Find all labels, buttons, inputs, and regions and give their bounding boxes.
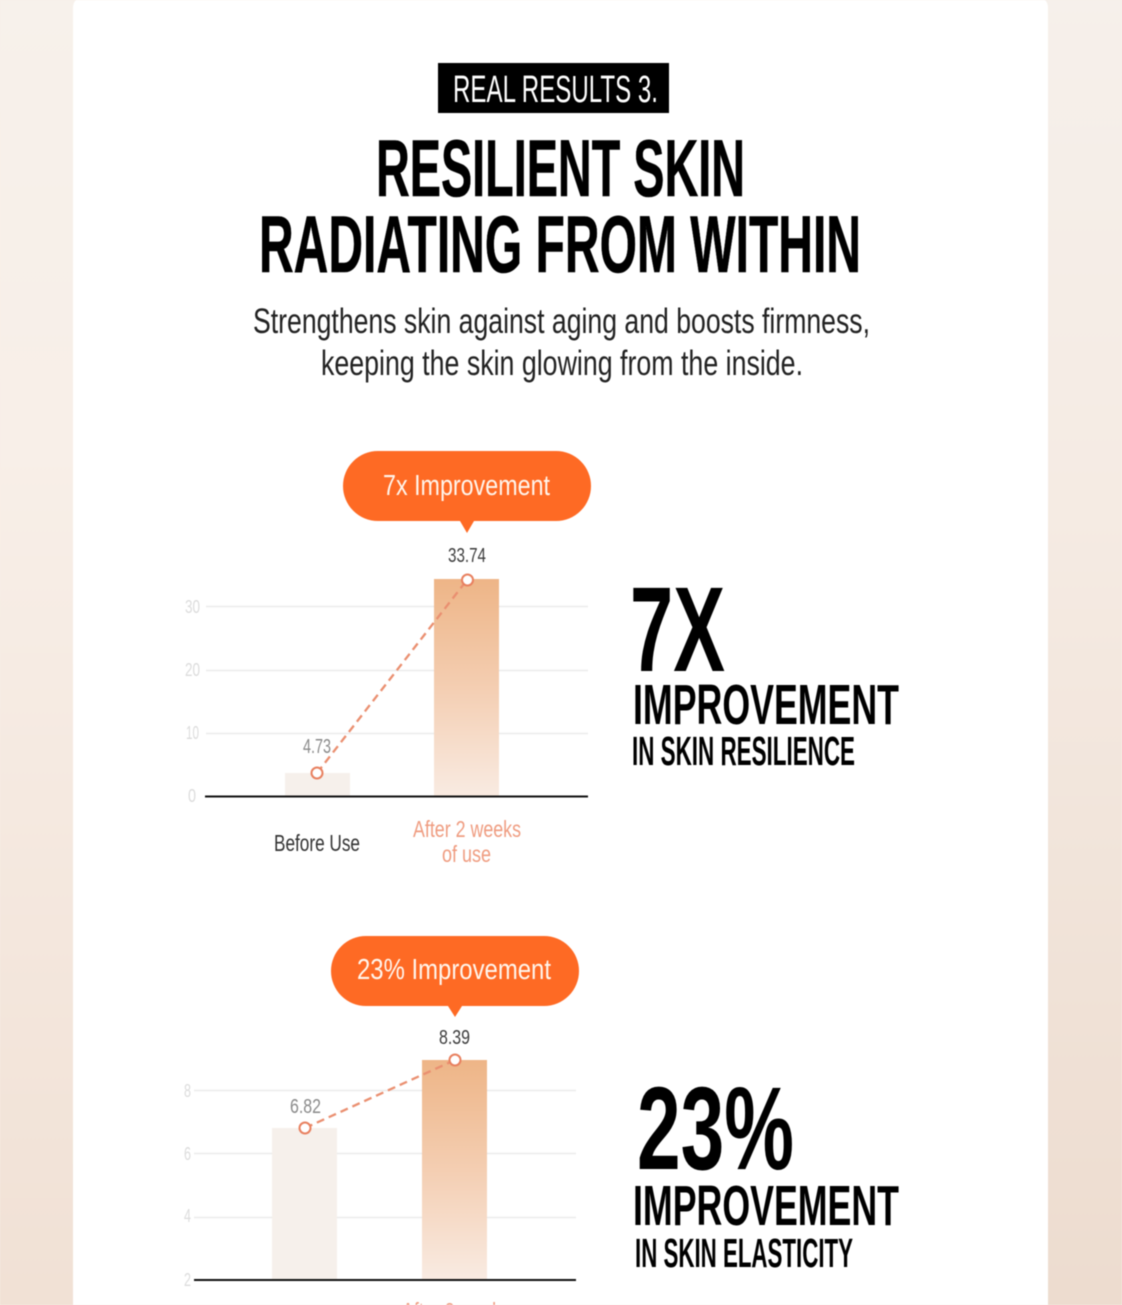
subtitle: Strengthens skin against aging and boosts firmness,	[253, 302, 870, 341]
dashed trend line	[300, 1054, 460, 1134]
grid lines and y axis labels: 6	[184, 1144, 191, 1164]
stat: 23% improvement in skin elasticity: IMPROVEMENT	[633, 1174, 899, 1238]
category labels: Before Use	[274, 830, 360, 856]
tag: real results 3: REAL RESULTS 3.	[453, 69, 658, 111]
grid lines and y axis labels: 10	[186, 723, 199, 743]
stat: 7x improvement in skin resilience	[630, 561, 899, 774]
subtitle: keeping the skin glowing from the inside.	[321, 344, 803, 383]
grid lines and y axis labels: 20	[185, 660, 200, 680]
stat: 7x improvement in skin resilience: IN SKIN RESILIENCE	[632, 728, 855, 774]
chart: skin elasticity	[184, 936, 579, 1305]
subtitle	[253, 302, 870, 383]
category labels: of use	[442, 841, 491, 867]
stat: 7x improvement in skin resilience: 7X	[630, 561, 725, 697]
grid lines and y axis labels: 8	[184, 1081, 191, 1101]
grid lines and y axis labels: 2	[184, 1270, 191, 1290]
bar: before use	[272, 1128, 337, 1279]
value labels: 6.82	[290, 1096, 321, 1118]
stat: 7x improvement in skin resilience: IMPROVEMENT	[633, 673, 899, 737]
value labels	[290, 1027, 470, 1118]
axis line	[205, 796, 588, 798]
stat: 23% improvement in skin elasticity	[633, 1063, 899, 1276]
value labels: 4.73	[303, 736, 331, 758]
grid lines and y axis labels: 0	[188, 786, 196, 806]
title	[259, 124, 861, 290]
grid lines and y axis labels	[185, 597, 588, 806]
callout: 23% improvement: 23% Improvement	[357, 954, 551, 986]
tag: real results 3	[438, 63, 669, 113]
title: RESILIENT SKIN	[376, 124, 745, 214]
value labels	[303, 545, 486, 758]
value labels: 33.74	[448, 545, 486, 567]
grid lines and y axis labels: 30	[185, 597, 200, 617]
grid lines and y axis labels: 4	[184, 1206, 191, 1226]
axis line	[194, 1279, 576, 1281]
stat: 23% improvement in skin elasticity: IN SKIN ELASTICITY	[635, 1230, 853, 1276]
category labels: After 2 weeks	[413, 816, 521, 842]
bar: before use	[285, 773, 350, 796]
stat: 23% improvement in skin elasticity: 23%	[637, 1063, 794, 1195]
bar: after 2 weeks	[422, 1060, 487, 1279]
callout: 23% improvement	[331, 936, 579, 1017]
value labels: 8.39	[439, 1027, 470, 1049]
callout: 7x improvement: 7x Improvement	[383, 470, 550, 502]
callout: 7x improvement	[343, 451, 591, 533]
dashed trend line	[312, 574, 473, 778]
grid lines and y axis labels	[184, 1081, 576, 1290]
bar: after 2 weeks	[434, 579, 499, 796]
category labels	[274, 816, 521, 867]
chart: skin resilience	[185, 451, 591, 867]
